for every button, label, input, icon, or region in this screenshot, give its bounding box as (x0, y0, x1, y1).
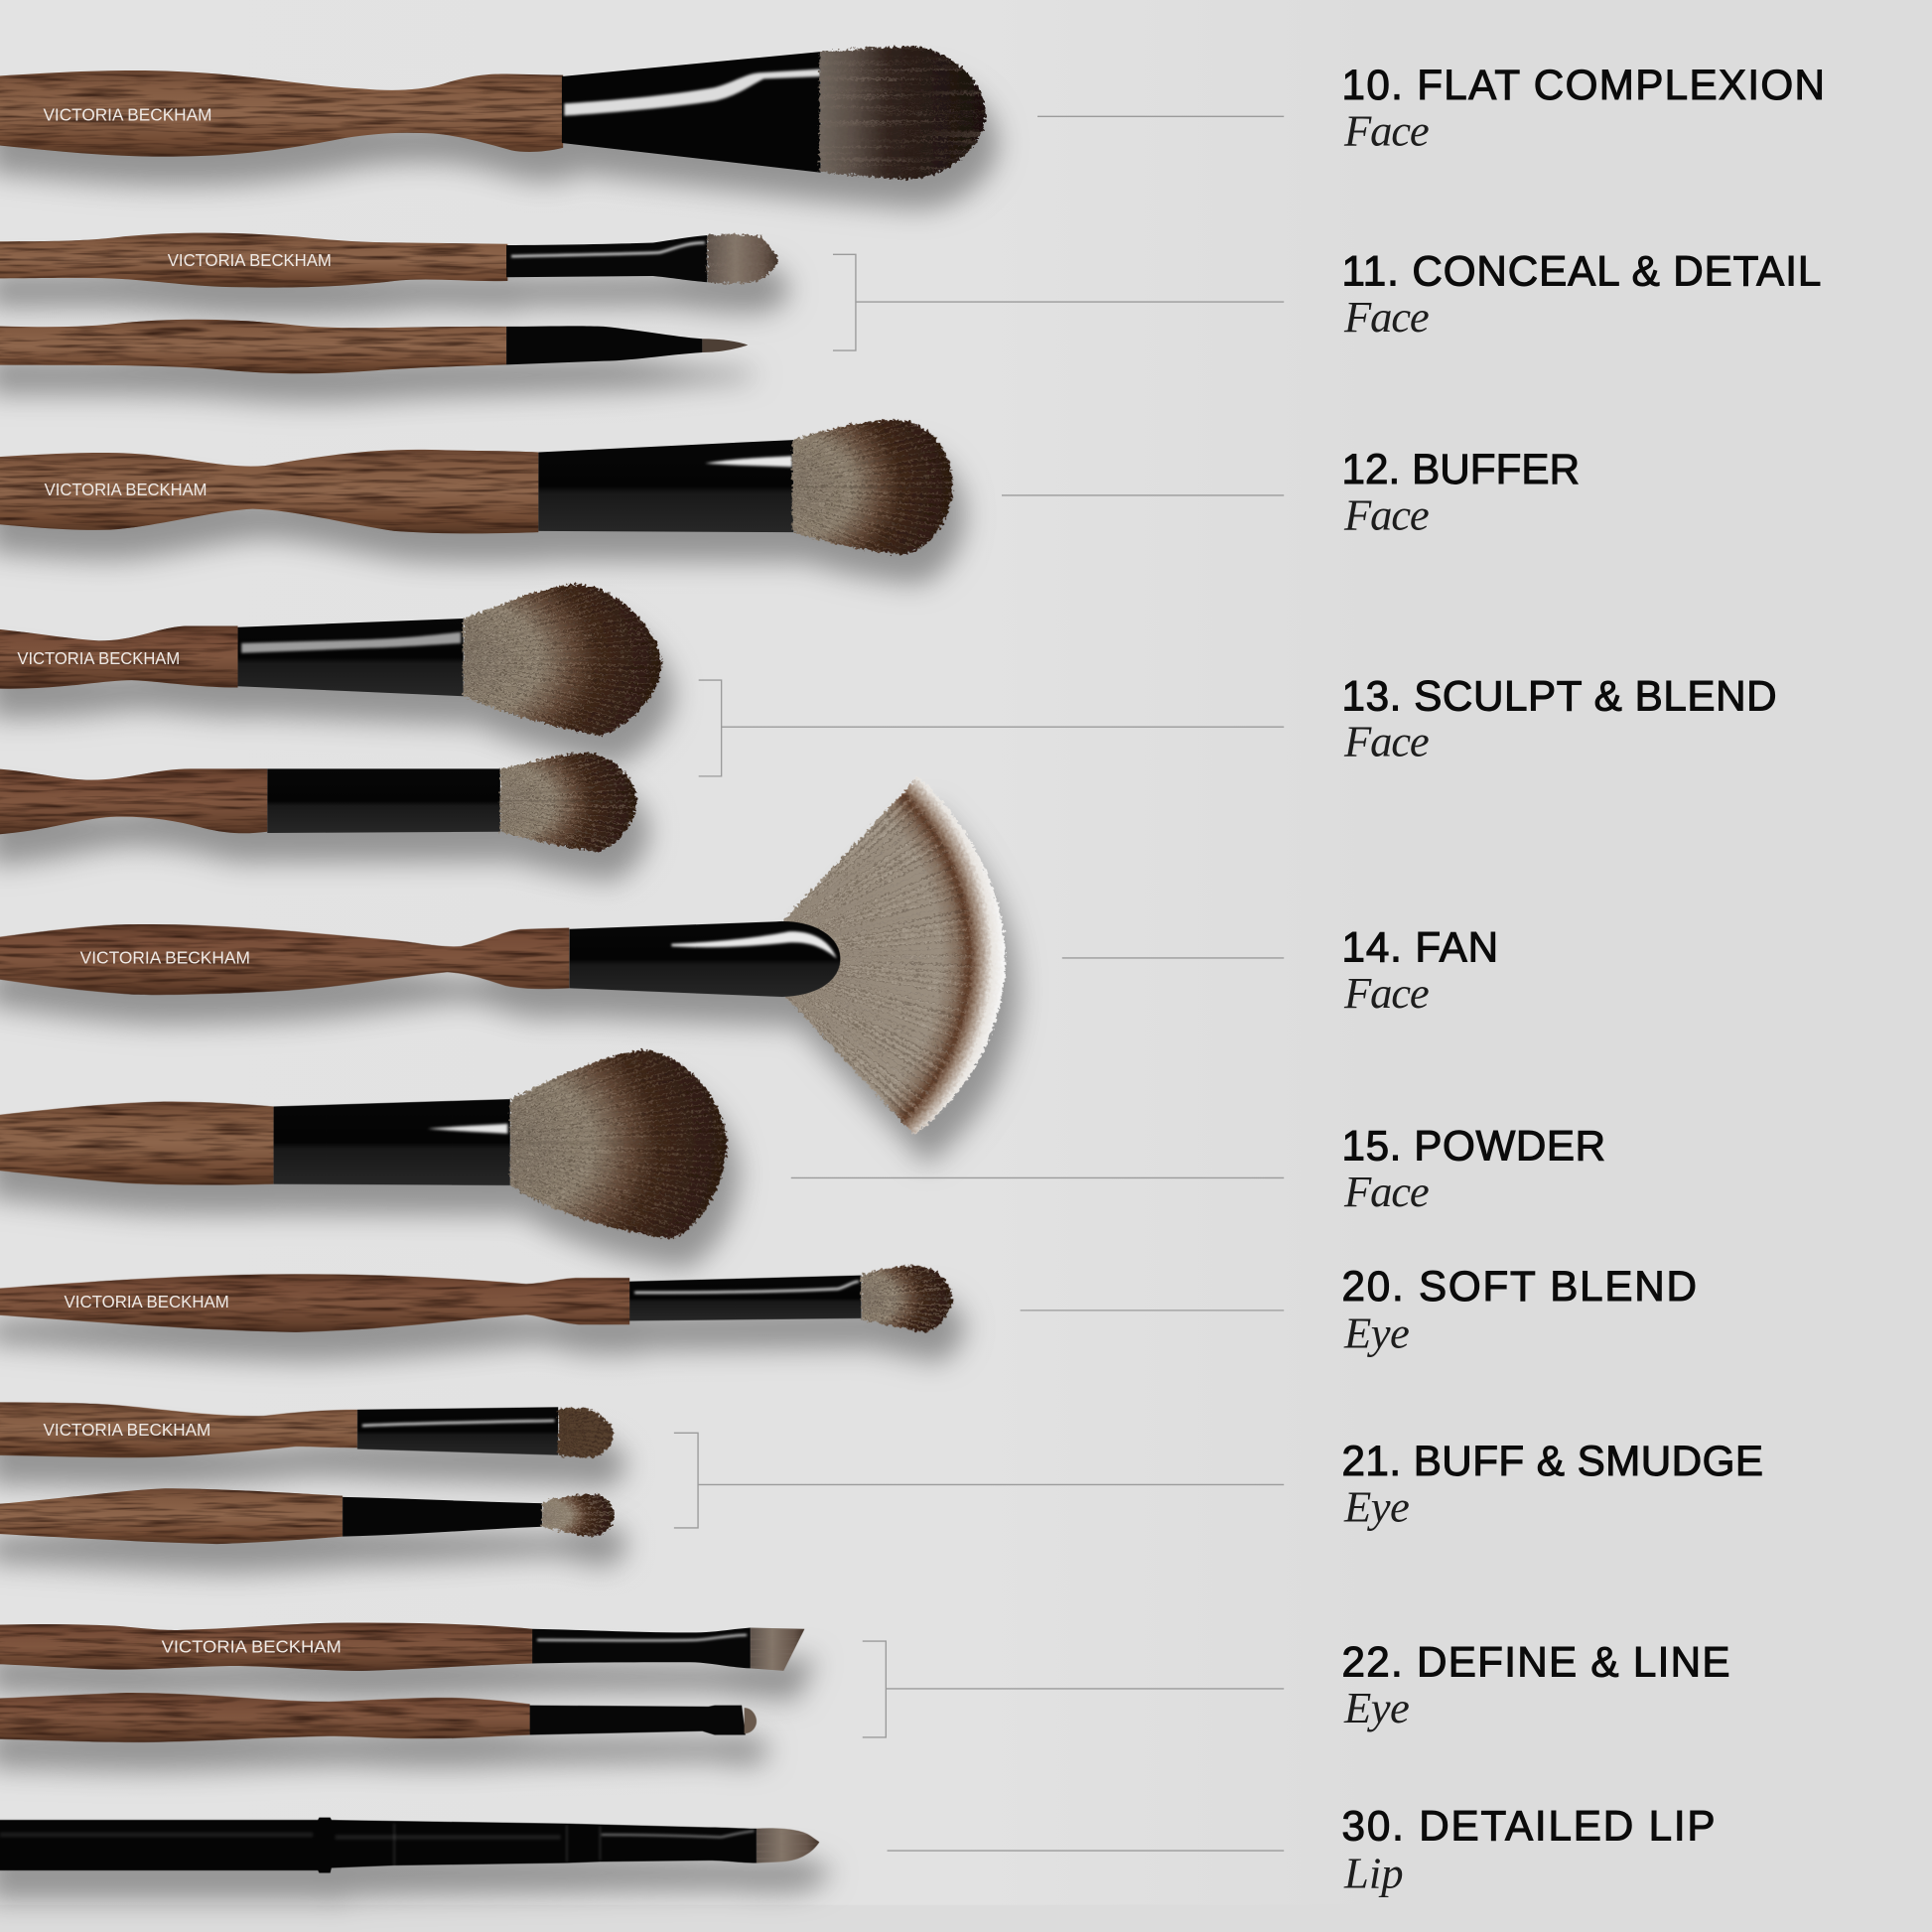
brush: 21 buff (0, 1382, 614, 1481)
ferrule highlight (705, 456, 792, 467)
label: 20 soft blend (1342, 1263, 1697, 1358)
ferrule (238, 619, 464, 696)
label: 12 buffer (1342, 446, 1580, 540)
connector: 30 (888, 1850, 1284, 1852)
ferrule highlight (362, 1421, 554, 1426)
bristles (707, 234, 777, 283)
ferrule (530, 1706, 746, 1734)
brush: 20 soft blend (0, 1264, 979, 1378)
label: 22 define and line: 22. DEFINE & LINE (1342, 1638, 1729, 1685)
connector: 20 (1021, 1310, 1284, 1311)
handle (0, 1622, 532, 1671)
brand mark: VICTORIA BECKHAM (45, 480, 207, 499)
connector: 10 (1037, 115, 1284, 117)
handle (0, 924, 569, 995)
label: 13 sculpt and blend (1342, 672, 1777, 765)
brush: 11 detail (0, 320, 748, 373)
label: 11 conceal and detail: Face (1343, 292, 1430, 342)
label: 14 fan: Face (1343, 968, 1430, 1018)
handle (0, 233, 507, 288)
label: 15 powder: 15. POWDER (1342, 1122, 1605, 1169)
connector: 15 (791, 1176, 1284, 1178)
label: 30 detailed lip: 30. DETAILED LIP (1342, 1803, 1716, 1850)
bristles (506, 1048, 755, 1281)
bristles (554, 1406, 639, 1501)
label: 10 flat complexion: 10. FLAT COMPLEXION (1342, 62, 1825, 108)
ferrule highlight (511, 242, 705, 256)
ferrule (562, 52, 821, 173)
brand mark: VICTORIA BECKHAM (43, 1420, 210, 1440)
ferrule highlight (428, 1124, 507, 1134)
handle (0, 70, 563, 157)
ferrule highlight (671, 931, 837, 959)
brand mark: VICTORIA BECKHAM (65, 1292, 229, 1311)
label: 20 soft blend: 20. SOFT BLEND (1342, 1263, 1697, 1310)
label: 30 detailed lip: Lip (1343, 1848, 1404, 1897)
label: 10 flat complexion: Face (1343, 105, 1430, 155)
ferrule (569, 921, 840, 997)
handle (0, 1402, 357, 1457)
label: 12 buffer: 12. BUFFER (1342, 446, 1580, 492)
label: 30 detailed lip (1342, 1803, 1716, 1897)
bristles (819, 47, 986, 179)
ferrule (538, 440, 793, 532)
brush: 13 sculpt (0, 582, 689, 775)
brand mark: VICTORIA BECKHAM (80, 948, 250, 968)
label: 13 sculpt and blend: Face (1343, 716, 1430, 765)
brush: 12 buffer (0, 418, 981, 600)
label: 21 buff and smudge (1342, 1438, 1763, 1532)
brand mark: VICTORIA BECKHAM (17, 648, 180, 668)
body (0, 1818, 757, 1872)
bristles (757, 1828, 819, 1863)
ferrule highlight (241, 632, 461, 653)
body highlights (0, 1824, 755, 1866)
handle (0, 1488, 343, 1544)
bracket connector: 11 (833, 254, 1284, 350)
handle (0, 320, 506, 373)
bristles (858, 1264, 979, 1376)
ferrule (629, 1276, 862, 1320)
ferrule (357, 1407, 558, 1455)
brush: 10 flat complexion (0, 47, 986, 179)
ferrule (274, 1099, 510, 1185)
label: 14 fan (1342, 924, 1498, 1018)
label: 15 powder (1342, 1122, 1605, 1216)
handle (0, 1693, 530, 1742)
label: 22 define and line (1342, 1638, 1729, 1732)
bristles (745, 1708, 757, 1733)
ferrule (532, 1627, 751, 1668)
bracket connector: 13 (699, 680, 1284, 776)
brush: 13 blend (0, 752, 664, 897)
ferrule (343, 1497, 542, 1537)
bristles (751, 1627, 804, 1671)
brush: 11 conceal (0, 233, 777, 288)
brush: 30 detailed lip (0, 1818, 819, 1872)
bristles (496, 752, 664, 897)
handle (0, 625, 238, 689)
bracket connector: 21 (674, 1433, 1284, 1528)
brand mark: VICTORIA BECKHAM (43, 105, 211, 125)
brand mark: VICTORIA BECKHAM (168, 250, 332, 270)
bracket connector: 22 (863, 1641, 1284, 1737)
handle (0, 1274, 629, 1332)
handle (0, 450, 538, 533)
label: 21 buff and smudge: 21. BUFF & SMUDGE (1342, 1438, 1763, 1484)
ferrule (506, 326, 702, 364)
ferrule highlight (564, 69, 821, 116)
ferrule highlight (634, 1282, 859, 1293)
label: 15 powder: Face (1343, 1167, 1430, 1216)
label: 21 buff and smudge: Eye (1343, 1482, 1410, 1532)
bristles (459, 582, 689, 775)
ferrule highlight (537, 1635, 747, 1640)
fan bristles (781, 778, 1035, 1173)
label: 11 conceal and detail (1342, 247, 1821, 342)
bristles (540, 1493, 639, 1581)
label: 14 fan: 14. FAN (1342, 924, 1498, 971)
bristles (789, 418, 981, 600)
brush: 22 define (0, 1622, 804, 1671)
connector: 12 (1002, 494, 1284, 496)
label: 20 soft blend: Eye (1343, 1309, 1410, 1358)
ferrule (506, 235, 707, 282)
brush: 15 powder (0, 1048, 755, 1281)
label: 22 define and line: Eye (1343, 1683, 1410, 1732)
connector: 14 (1062, 957, 1284, 959)
brand mark: VICTORIA BECKHAM (162, 1636, 342, 1656)
label: 11 conceal and detail: 11. CONCEAL & DETAIL (1342, 247, 1821, 294)
brush: 21 smudge (0, 1465, 614, 1564)
bristles (702, 339, 748, 352)
brush: 22 line (0, 1693, 757, 1742)
label: 10 flat complexion (1342, 62, 1825, 155)
brush: 14 fan (0, 776, 1006, 1135)
label: 12 buffer: Face (1343, 490, 1430, 540)
handle (0, 767, 267, 835)
handle (0, 1102, 274, 1184)
ferrule (267, 768, 500, 833)
label: 13 sculpt and blend: 13. SCULPT & BLEND (1342, 672, 1777, 719)
